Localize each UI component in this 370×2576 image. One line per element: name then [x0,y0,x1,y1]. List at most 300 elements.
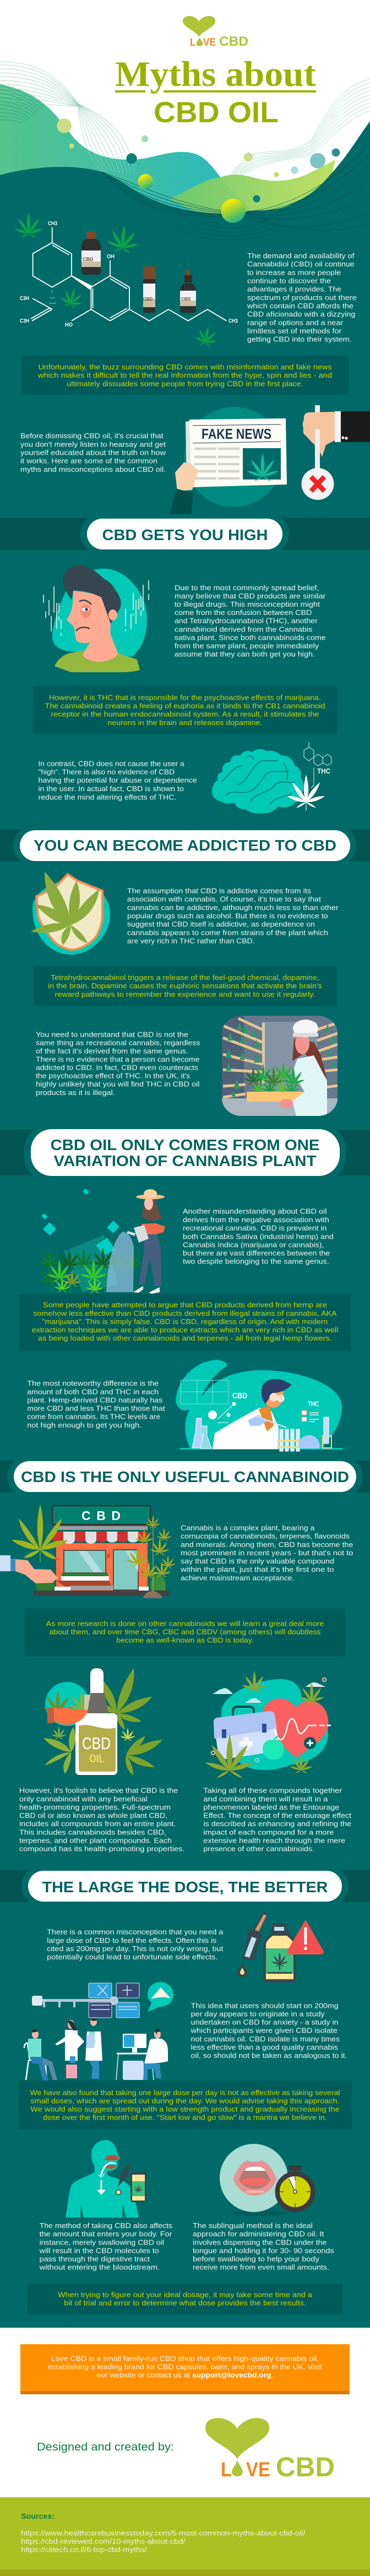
hair [262,1379,292,1404]
text: method of taking CBD: will result in the CBD molecules to [39,2246,159,2254]
hand [0,1555,58,1583]
text: the most noteworthy difference: The most noteworthy difference is the [27,1379,159,1387]
green bushes [36,1575,166,1597]
illustration: swallowing oil [66,2140,146,2218]
checklist [302,1410,319,1422]
left mesh lines [0,62,134,175]
clouds [212,1682,326,1703]
text: sublingual method: The sublingual method is the ideal [193,2221,313,2230]
back page [186,421,193,487]
shadow [231,2210,286,2216]
wall [56,1543,148,1591]
callout: hemp versus marijuana: as being loaded with other cannabinoids and terpenes - all from legal hemp flowers. [38,1334,332,1342]
text: you need to understand: the psychoactive effect of THC. In the UK, it's [36,1072,191,1080]
text: you need to understand: highly unlikely that you will find THC in CBD oil [36,1080,199,1088]
OIL text: OIL [89,1753,104,1765]
coat [292,1055,327,1116]
callout: THC psychoactive effects: neurons in the brain and releases dopamine. [108,718,262,727]
hand [175,462,198,491]
banner: CBD oil only comes from one variation: VARIATION OF CANNABIS PLANT [54,1152,316,1169]
header logo [183,16,248,49]
text: this idea that users [191,2001,347,2060]
teal blob [32,881,110,955]
CBD chemical structure diagram: OH [107,254,115,260]
neck [83,630,118,662]
bottle body [263,1924,296,1983]
CBD label: CBD [232,1391,247,1401]
soil mound [143,1591,162,1598]
lips [233,2161,276,2196]
lower left leaf [43,1727,75,1774]
bottle leaf [271,1952,288,1970]
teeth [244,2166,265,2171]
text: entourage effect: Taking all of these compounds together [203,1787,342,1795]
heart [263,1698,328,1758]
text: this idea that users: undertaken on CBD for anxiety - a study in [191,2018,339,2027]
dropper bottle: CBD [181,297,191,302]
intro text: CBD aficionado with a dizzying [247,310,355,318]
planter and ledge [61,1573,109,1581]
legs and overalls [139,1228,161,1286]
text: in contrast [38,760,197,801]
callout: other cannabinoids research [25,1608,345,1657]
text: the most noteworthy difference: plant. Hemp-derived CBD naturally has [27,1396,163,1404]
callout: THC psychoactive effects [33,686,337,734]
orange about box: Love CBD is a small family-run CBD shop that offers high-quality cannabis oil, [51,2354,319,2362]
sleeve [168,489,193,518]
shield [36,874,102,950]
designed and created by: Designed and created by: [37,2441,174,2453]
text: cannabis is a complex plant [180,1524,353,1582]
callout: dopamine: reward pathways to remember the experience and want to use it regularly. [55,990,315,998]
label [266,1948,293,1974]
intro text: The demand and availability of [247,252,355,260]
intro text [247,252,357,344]
text: method of taking CBD [39,2221,172,2272]
text: the assumption that CBD is addictive [127,887,339,945]
callout: other cannabinoids research: about them, and over time CBG, CBC and CBDV (among others) will doubtless [50,1627,321,1636]
text: cannabis is a complex plant: say that CBD is the only valuable compound [181,1557,334,1565]
text: in contrast: in the user. In actual fact, CBD is shown to [38,785,184,793]
illustration: CBD store [0,1504,176,1598]
text: sublingual method [193,2221,334,2272]
callout: ideal dosage: When trying to figure out your ideal dosage, it may take some time and a [58,2290,313,2299]
mouth [105,2155,120,2169]
yellow-green hill [170,160,335,215]
hat [136,1189,165,1199]
header wave artwork [0,62,370,242]
callout: other cannabinoids research: become as well-known as CBD is today. [116,1636,254,1644]
intro text: range of options and a near [247,318,344,326]
CBD chemical structure diagram: C3H [20,318,29,324]
text: method of taking CBD: instance, merely swallowing CBD oil [40,2238,164,2246]
callout: several small doses [18,2081,352,2129]
callout: misinformation: which makes it difficult to tell the real information from the hype, spin and lies - and [37,371,332,379]
stopwatch crown [289,2165,302,2172]
mouth interior [239,2166,270,2189]
roller bottle: CBD [143,297,153,302]
logo wordmark: CBD [276,2452,335,2482]
text: the assumption that CBD is addictive: suggest that CBD itself is addictive, as dependence on [127,920,315,928]
leaves [204,1671,325,1779]
callout: ideal dosage [28,2284,342,2314]
text: you need to understand: There is no evidence that a person can become [36,1055,199,1064]
text: method of taking CBD: The method of taking CBD also affects [40,2221,172,2230]
text: entourage effect: extensive health reach through the mere [203,1836,345,1844]
sources panel: https://cbd-reviewed.com/10-myths-about-cbd/ [21,2537,186,2546]
computer desk and operator [116,2029,168,2080]
round flask [298,1435,319,1448]
CBD chemical structure diagram: CH3 [228,318,238,324]
CBD chemical structure diagram: HO [65,322,73,328]
text: common misconception: potentially could lead to unfortunate side effects. [47,1953,217,1961]
face [295,1037,309,1054]
glasses [270,1393,284,1402]
patient with chair [24,2029,57,2081]
intro text: limitless set of methods for [247,327,342,335]
top right leaf [93,1668,152,1730]
hair [292,1039,327,1079]
orange about box: establishing a leading brand for CBD capsules, balm, and sprays in the UK. Visit [48,2362,322,2371]
CBD chemical structure diagram: C3H [20,296,29,302]
text: however foolish to believe: includes all compounds from an entire plant. [19,1820,176,1828]
icon: small cannabis leaves in intro [14,213,220,348]
chart panel [181,1380,228,1404]
door [113,1550,138,1590]
flasks [192,1418,211,1448]
text: entourage effect: impact of each compound for a more [203,1828,334,1836]
door frame [262,1023,265,1083]
ear [108,609,117,620]
intro text: advantages it provides. The [247,285,341,293]
wall shadow [56,1581,113,1590]
text: the assumption that CBD is addictive: popular drugs such as alcohol. But there is no evidence to [127,912,328,920]
stopwatch body [275,2171,315,2212]
text: due to the most commonly spread belief: many believe that CBD products are similar [175,592,326,600]
text: however foolish to believe [19,1787,184,1853]
shelves [223,1019,338,1097]
pole [315,405,320,469]
wheels [32,1996,118,2006]
callout: hemp versus marijuana: Some people have attempted to argue that CBD products derived from hemp are [43,1301,327,1309]
plants [38,1248,145,1294]
icon: fake news newspaper [168,407,287,518]
illustration: health kit and heart [204,1671,331,1779]
text: in contrast: reduce the mind altering effects of THC. [38,793,176,801]
collar [87,1693,108,1713]
intro text: getting CBD into their system. [247,335,351,344]
dark band on green hill [0,86,44,123]
apple [263,1736,284,1760]
face [67,591,111,643]
text: cannabis is a complex plant: and minerals. Among them, CBD has become the [181,1540,353,1549]
callout: THC psychoactive effects: However, it is THC that is responsible for the psychoactive effects of marijuana. [49,694,321,702]
text: another misunderstanding: both Cannabis Sativa (industrial hemp) and [183,1232,334,1240]
article lines [194,449,240,478]
torso creases [80,2204,126,2218]
illustration: scientist in lab [176,1360,343,1451]
banner: CBD oil only comes from one variation [0,1125,370,1181]
text: entourage effect: phenomenon labeled as the Entourage [203,1803,339,1811]
THC connector [311,767,314,788]
picture box [243,448,281,482]
text: another misunderstanding [183,1207,334,1266]
CBD chemical structure diagram [20,221,238,328]
text: common misconception: There is a common misconception that you need a [47,1928,224,1936]
test tube rack [277,1429,302,1451]
banner: you can become addicted [0,826,370,865]
text: due to the most commonly spread belief: cannabinoid derived from the Cannabis [175,625,313,633]
text: another misunderstanding: Cannabis Indica (marijuana or cannabis), [183,1240,324,1249]
doctor one [55,2020,84,2078]
text: this idea that users: not cannabis oil. CBD isolate is many times [191,2035,340,2043]
THC label: THC [308,1400,319,1408]
window [64,1550,106,1573]
text: the assumption that CBD is addictive: association with cannabis. Of course, it's true to say that [127,895,321,903]
callout: misinformation: ultimately dissuades some people from trying CBD in the first place. [67,380,303,388]
awning stripes [53,1532,148,1544]
cuff [335,411,341,442]
orange about box [20,2344,350,2394]
text: cannabis is a complex plant: most prominent in recent years - but that's not to [181,1549,353,1557]
text: the assumption that CBD is addictive: The assumption that CBD is addictive comes from its [127,887,311,895]
logo wordmark [190,34,248,49]
text: method of taking CBD: the amount that enters your body. For [40,2230,172,2238]
text: another misunderstanding: but there are vast differences between the [183,1249,330,1257]
paper [189,418,287,487]
banner: the large the dose the better: THE LARGE THE DOSE, THE BETTER [42,1878,328,1896]
white leaf [287,775,325,810]
big leaf [12,1504,68,1562]
shoes [133,1286,160,1294]
hair [63,565,121,624]
text: however foolish to believe: compound has its health-promoting properties. [19,1845,184,1853]
callout: hemp versus marijuana: somehow less effective than CBD products derived from illegal strains of cannabis, AKA [33,1309,337,1317]
intro text: continue to discover the [247,276,331,285]
water stream [106,1232,134,1292]
awning bar [57,1526,148,1530]
text: you need to understand: products as it is illegal. [36,1088,115,1097]
teal circle [45,1682,89,1726]
text: another misunderstanding: recreational cannabis. CBD is prevalent in [183,1224,327,1232]
sources panel: https://www.healthcarebusinesstoday.com/5-most-common-myths-about-cbd-oil/ [21,2529,306,2537]
callout: several small doses: dose over the first month of use. "Start low and go slow" is a mantra we believe in. [43,2114,327,2122]
logo wordmark: LOVE [221,2458,270,2481]
CBD text: CBD [82,1734,111,1753]
background panels [64,1235,118,1292]
text: you need to understand [36,1030,200,1097]
CBD chemical structure diagram: CH3 [48,221,57,227]
text: due to the most commonly spread belief: and Tetrahydrocannabinol (THC), another [175,617,318,625]
cannabis plants [243,1061,305,1094]
logo drop [196,37,203,46]
coat [213,1408,279,1449]
room [222,1016,338,1116]
text: method of taking CBD: without entering the bloodstream. [39,2263,160,2272]
text: in contrast: having the potential for abuse or dependence [38,776,197,785]
callout: ideal dosage: bit of trial and error to determine what dose provides the best results. [64,2299,306,2307]
logo wordmark [221,2452,335,2482]
banner: you can become addicted: YOU CAN BECOME ADDICTED TO CBD [34,837,336,854]
text: before dismissing CBD oil: it works. Here are some of the common [20,457,157,465]
callout: misinformation: Unfortunately, the buzz surrounding CBD comes with misinformation and fake news [39,363,332,371]
callout: misinformation [21,356,349,395]
intro text: Cannabidiol (CBD) oil continue [247,260,355,268]
text: the assumption that CBD is addictive: cannabis appears to come from strains of the plant which [127,928,328,936]
logo wordmark: LOVE [190,37,216,48]
callout: hemp versus marijuana: extraction techniques we are able to produce extracts which are very rich in CBD as well [32,1326,338,1334]
kit handle [233,1707,254,1717]
text: this idea that users: This idea that users should start on 200mg [191,2001,339,2009]
text: you need to understand: same thing as recreational cannabis, regardless [36,1038,200,1047]
banner: CBD is the only useful cannabinoid: CBD IS THE ONLY USEFUL CANNABINOID [21,1468,349,1485]
mid green hill [0,84,253,212]
teal blobs [176,1360,342,1448]
text: entourage effect: is described as enhancing and refining the [203,1820,351,1828]
text: the most noteworthy difference: come from cannabis. Its THC levels are [27,1413,160,1421]
text: before dismissing CBD oil: yourself educated about the truth on how [20,448,166,457]
banner: the large the dose the better [0,1866,370,1906]
callout: several small doses: We have also found that taking one large dose per day is not as effective as taking several [30,2088,340,2096]
label [79,1725,116,1772]
text: you need to understand: addicted to CBD. In fact, CBD even counteracts [36,1064,198,1072]
text: before dismissing CBD oil [20,432,166,473]
callout: THC psychoactive effects: The cannabinoid creates a feeling of euphoria as it binds to the CB1 cannabinoid [45,702,325,710]
brow and mouth [76,600,91,631]
watering can [127,1225,149,1243]
illustration: lab team [24,1982,173,2081]
text: common misconception: large dose of CBD to feel the effects. Often this is [47,1936,217,1945]
ECG line [274,1719,331,1740]
box [247,1092,304,1102]
illustration: CBD oil bottle [42,1668,162,1776]
logo drop [232,2460,243,2476]
illustration: gardener watering plants [38,1189,165,1294]
hat [293,1020,318,1037]
footer logo [205,2418,335,2482]
text: you need to understand: of the fact it's derived from the same genus. [36,1047,188,1055]
callout: several small doses: We would also suggest starting with a low strength product and gradually increasing the [30,2105,340,2113]
bottle one: CBD [83,257,94,262]
callout: hemp versus marijuana [19,1294,351,1351]
floating diamonds [41,1189,119,1255]
circle [220,2144,288,2212]
text: cannabis is a complex plant: within the plant, just that it's the first one to [180,1565,334,1573]
illustration: mouth and stopwatch [220,2144,315,2216]
callout: hemp versus marijuana: "marijuana". This is simply false. CBD is CBD, regardless of origin. And with modern [42,1317,328,1326]
sign [52,1506,150,1524]
dark teal hill [0,121,370,242]
right mesh lines [231,79,370,190]
neck [259,1405,274,1431]
banner: CBD oil only comes from one variation: CBD OIL ONLY COMES FROM ONE [51,1136,319,1153]
kit [214,1711,280,1760]
text: in contrast: In contrast, CBD does not cause the user a [38,760,184,768]
text: another misunderstanding: derives from the negative association with [183,1216,329,1224]
title line: Myths about: Myths about [115,55,316,94]
text: this idea that users: less effective than a good quality cannabis [191,2043,338,2051]
text: the assumption that CBD is addictive: are very rich in THC rather than CBD. [127,936,254,945]
logo heart [205,2418,269,2459]
icon: dropper, bottle and warning [237,1912,323,1983]
suit sleeve [341,411,370,442]
text: however foolish to believe: CBD oil or also known as whole plant CBD, [19,1811,167,1820]
text: however foolish to believe: health-promoting properties. Full-spectrum [19,1803,171,1811]
text: you need to understand: You need to understand that CBD is not the [36,1030,188,1038]
text: another misunderstanding: two despite belonging to the same genus. [183,1257,329,1266]
sources panel [0,2497,370,2576]
callout: dopamine: Tetrahydrocannabinol triggers a release of the feel-good chemical, dopamine, [51,973,319,982]
hair [142,1198,162,1221]
THC molecule [304,742,331,766]
text: sublingual method: involves dispensing the CBD under the [193,2238,327,2246]
swallow arrows [97,2163,116,2194]
doctor two [85,2017,102,2079]
title line: CBD OIL: CBD OIL [154,96,279,129]
hand [47,1708,88,1725]
text: sublingual method: approach for administering CBD oil. It [193,2230,324,2238]
bubble [148,1982,173,2012]
mini dropper [116,2162,130,2194]
dropper [242,1912,268,1960]
panels [89,1983,139,2018]
vibration lines [43,580,149,636]
cross badge [302,468,334,500]
intro text: to increase as more people [247,268,341,276]
bricks [55,1551,144,1585]
intro text: spectrum of products out there [247,293,357,302]
text: in contrast: "high". There is also no evidence of CBD [38,768,175,776]
warning triangle [287,1921,323,1954]
text: the most noteworthy difference: not high enough to get you high. [27,1421,142,1429]
cross [239,1737,253,1750]
shelf plants [225,1022,336,1097]
title [115,55,316,129]
tube on stand [323,1417,331,1448]
floating bubbles [57,118,340,223]
mini bottle [130,2172,146,2202]
text: the most noteworthy difference: more CBD and less THC than those that [27,1404,165,1413]
illustration: tired man [43,565,149,672]
stopwatch hand and ticks [280,2176,311,2207]
fist [303,412,335,462]
headline: FAKE NEWS [202,426,271,442]
icon: leaf on shield [31,872,110,955]
hemp plant [126,1515,176,1592]
logo wordmark: CBD [219,34,248,49]
roller bottle [143,266,155,313]
pavement [33,1591,170,1596]
table [180,1448,343,1450]
banner: CBD is the only useful cannabinoid [0,1457,370,1496]
title underline [115,90,316,92]
stopwatch face [280,2176,311,2207]
body silhouette [66,2140,139,2218]
text: due to the most commonly spread belief: Due to the most commonly spread belief, [175,584,319,592]
text: however foolish to believe: This includes cannabinoids besides CBD, [19,1828,166,1836]
lower highlight [247,2191,263,2193]
sources panel: https://ciitech.co.il/6-top-cbd-myths/ [21,2546,147,2554]
text: cannabis is a complex plant: achieve mainstream acceptance. [181,1573,295,1582]
shirt [55,650,140,672]
brain outline [212,749,304,814]
text: due to the most commonly spread belief [175,584,326,658]
green leaf [31,872,99,945]
text: before dismissing CBD oil: Before dismissing CBD oil, it's crucial that [20,432,164,440]
rules [193,424,281,443]
hand [280,1099,293,1108]
illustration: greenhouse worker [222,1016,338,1116]
